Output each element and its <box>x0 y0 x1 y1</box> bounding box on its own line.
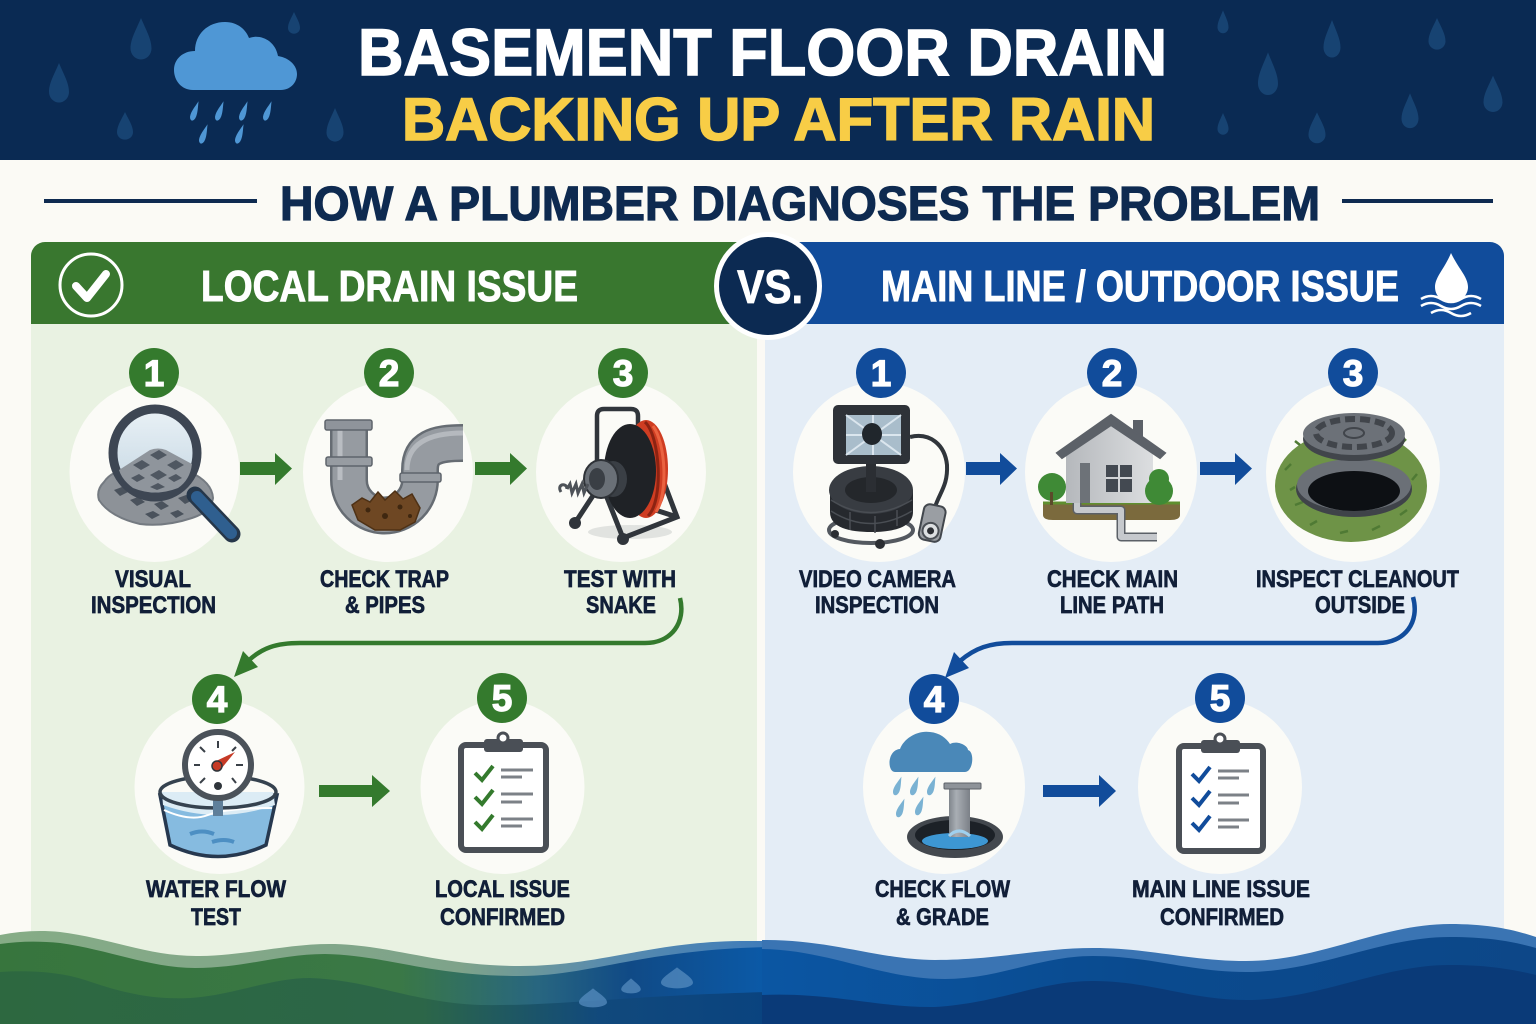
left step 5: local issue confirmed <box>420 673 584 931</box>
label: INSPECTION <box>91 592 216 619</box>
label <box>1132 876 1310 931</box>
step number 2: 2 <box>1102 353 1122 394</box>
heading: local drain issue: LOCAL DRAIN ISSUE <box>201 262 578 311</box>
step number 2 <box>1087 348 1137 398</box>
label: INSPECTION <box>815 592 939 619</box>
label <box>146 876 286 931</box>
label: CHECK MAIN <box>1047 566 1178 593</box>
arrow 4 to 5 <box>319 775 390 807</box>
title: BASEMENT FLOOR DRAIN <box>358 15 1167 89</box>
step number 1: 1 <box>871 353 891 394</box>
right step 3: inspect cleanout outside <box>1256 348 1459 619</box>
label <box>320 566 449 619</box>
label: SNAKE <box>586 592 656 619</box>
arrow 2 to 3 <box>475 453 527 485</box>
right step 1: video camera inspection <box>793 348 965 619</box>
label: MAIN LINE ISSUE <box>1132 876 1310 903</box>
label <box>875 876 1010 931</box>
header banner <box>0 0 1536 160</box>
water waves footer <box>0 924 1536 1024</box>
page background <box>0 0 1536 160</box>
icon: p-trap with debris <box>325 420 463 530</box>
icon: water drop with waves <box>1421 253 1481 316</box>
vs badge: VS. <box>737 260 803 313</box>
arrow 1 to 2 (right) <box>966 453 1017 485</box>
step number 5 <box>477 673 527 723</box>
icon: clipboard checklist <box>461 733 546 850</box>
right step 5: main line issue confirmed <box>1132 673 1310 931</box>
label: VIDEO CAMERA <box>799 566 956 593</box>
arrow 4 to 5 (right) <box>1043 775 1116 807</box>
right step 2: check main line path <box>1025 348 1197 619</box>
label: CHECK TRAP <box>320 566 449 593</box>
icon: clipboard checklist <box>1179 734 1263 851</box>
label: & PIPES <box>345 592 425 619</box>
step number 4: 4 <box>207 679 228 720</box>
label <box>1256 566 1459 619</box>
label <box>435 876 570 931</box>
label: CHECK FLOW <box>875 876 1010 903</box>
icon: house with main line <box>1038 415 1180 537</box>
step number 1: 1 <box>144 353 164 394</box>
curved arrow 3 to 4 (left) <box>234 598 681 677</box>
icon: drain snake machine <box>560 409 677 545</box>
icon: rain over drain pipe <box>890 732 1003 858</box>
icon: sewer camera reel <box>829 405 947 549</box>
step number 4 <box>192 674 242 724</box>
label: LINE PATH <box>1060 592 1164 619</box>
step number 3: 3 <box>613 353 633 394</box>
subtitle with rules: HOW A PLUMBER DIAGNOSES THE PROBLEM <box>280 178 1320 231</box>
step number 5: 5 <box>1210 678 1230 719</box>
arrow 2 to 3 (right) <box>1200 453 1252 485</box>
label: TEST WITH <box>564 566 676 593</box>
vs badge <box>714 232 822 340</box>
step number 3: 3 <box>1343 353 1363 394</box>
step number 2 <box>364 348 414 398</box>
icon: gauge over water tub <box>160 732 277 856</box>
label: WATER FLOW <box>146 876 286 903</box>
heading: main line / outdoor issue: MAIN LINE / OUTDOOR ISSUE <box>881 262 1399 311</box>
label <box>564 566 676 619</box>
step number 1 <box>129 348 179 398</box>
step number 5: 5 <box>492 678 512 719</box>
label: CONFIRMED <box>440 904 565 931</box>
label: & GRADE <box>896 904 989 931</box>
step number 3 <box>1328 348 1378 398</box>
icon: cleanout with lid <box>1275 413 1427 542</box>
label: VISUAL <box>115 566 191 593</box>
icon: rain cloud <box>174 22 297 145</box>
label <box>1047 566 1178 619</box>
step number 1 <box>856 348 906 398</box>
icon: check circle <box>60 254 122 316</box>
panel: local drain issue <box>31 242 768 1000</box>
left step 3: test with snake <box>536 348 706 619</box>
label: LOCAL ISSUE <box>435 876 570 903</box>
title <box>358 15 1167 153</box>
curved arrow 3 to 4 (right) <box>945 597 1415 678</box>
step number 4 <box>909 674 959 724</box>
step number 3 <box>598 348 648 398</box>
arrow 1 to 2 <box>240 453 292 485</box>
label: CONFIRMED <box>1160 904 1284 931</box>
label: TEST <box>191 904 241 931</box>
icon: magnifier over drain <box>98 409 232 534</box>
left step 1: visual inspection <box>70 348 240 619</box>
left step 2: check trap and pipes <box>303 348 473 619</box>
panel: main line / outdoor issue <box>765 242 1504 1000</box>
label: OUTSIDE <box>1315 592 1405 619</box>
step number 4: 4 <box>924 679 945 720</box>
label <box>91 566 216 619</box>
left step 4: water flow test <box>134 674 304 931</box>
label: INSPECT CLEANOUT <box>1256 566 1459 593</box>
right step 4: check flow and grade <box>863 674 1025 931</box>
label <box>799 566 956 619</box>
step number 2: 2 <box>379 353 399 394</box>
title: BACKING UP AFTER RAIN <box>402 86 1155 153</box>
step number 5 <box>1195 673 1245 723</box>
